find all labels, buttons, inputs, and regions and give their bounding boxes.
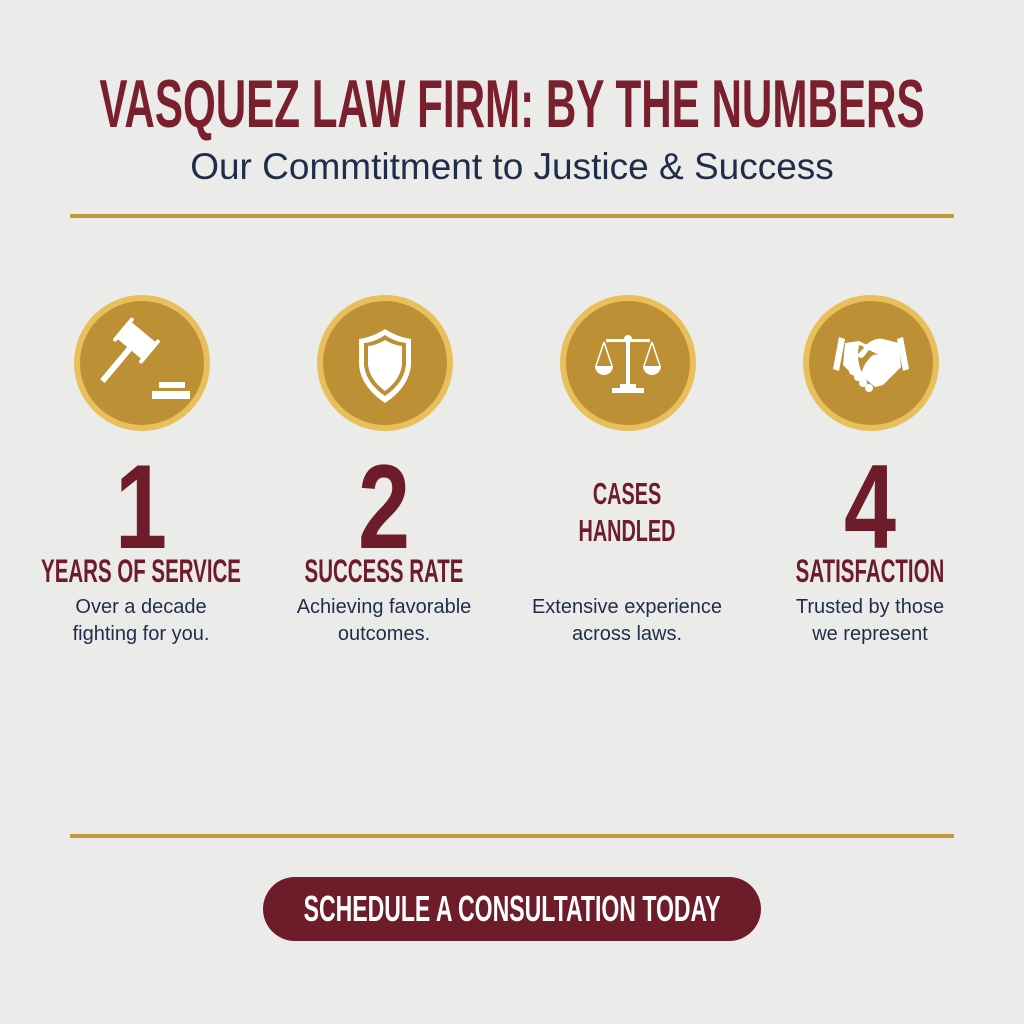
stat: years of service (41, 295, 241, 645)
stat: cases handled (532, 295, 722, 645)
label: cases handled (578, 476, 676, 548)
title: VASQUEZ LAW FIRM: BY THE NUMBERS (99, 66, 925, 142)
description: we represent (812, 623, 928, 645)
description: Over a decade (75, 596, 207, 618)
label: YEARS OF SERVICE (41, 553, 241, 589)
subtitle: Our Commtitment to Justice & Success (190, 146, 834, 187)
description (72, 596, 209, 645)
description (532, 596, 722, 645)
label: cases handled: CASES (593, 476, 661, 511)
icon: handshake (803, 295, 939, 431)
description: Achieving favorable (297, 596, 471, 618)
icon: gavel (74, 295, 210, 431)
label: SATISFACTION (796, 553, 944, 589)
description (796, 596, 944, 645)
CTA button: SCHEDULE A CONSULTATION TODAY (304, 888, 720, 929)
CTA button (263, 877, 761, 941)
label: SUCCESS RATE (305, 553, 463, 589)
icon: scales (560, 295, 696, 431)
number 1: 1 (115, 440, 167, 574)
number 2: 2 (358, 440, 410, 574)
label: cases handled: HANDLED (578, 513, 676, 548)
description (296, 596, 471, 645)
description: across laws. (572, 623, 682, 645)
description: Trusted by those (796, 596, 944, 618)
icon: shield (317, 295, 453, 431)
description: Extensive experience (532, 596, 722, 618)
number 4: 4 (844, 440, 896, 574)
description: fighting for you. (73, 623, 209, 645)
stat: success rate (296, 295, 471, 645)
description: outcomes. (338, 623, 430, 645)
stat: satisfaction (796, 295, 944, 645)
